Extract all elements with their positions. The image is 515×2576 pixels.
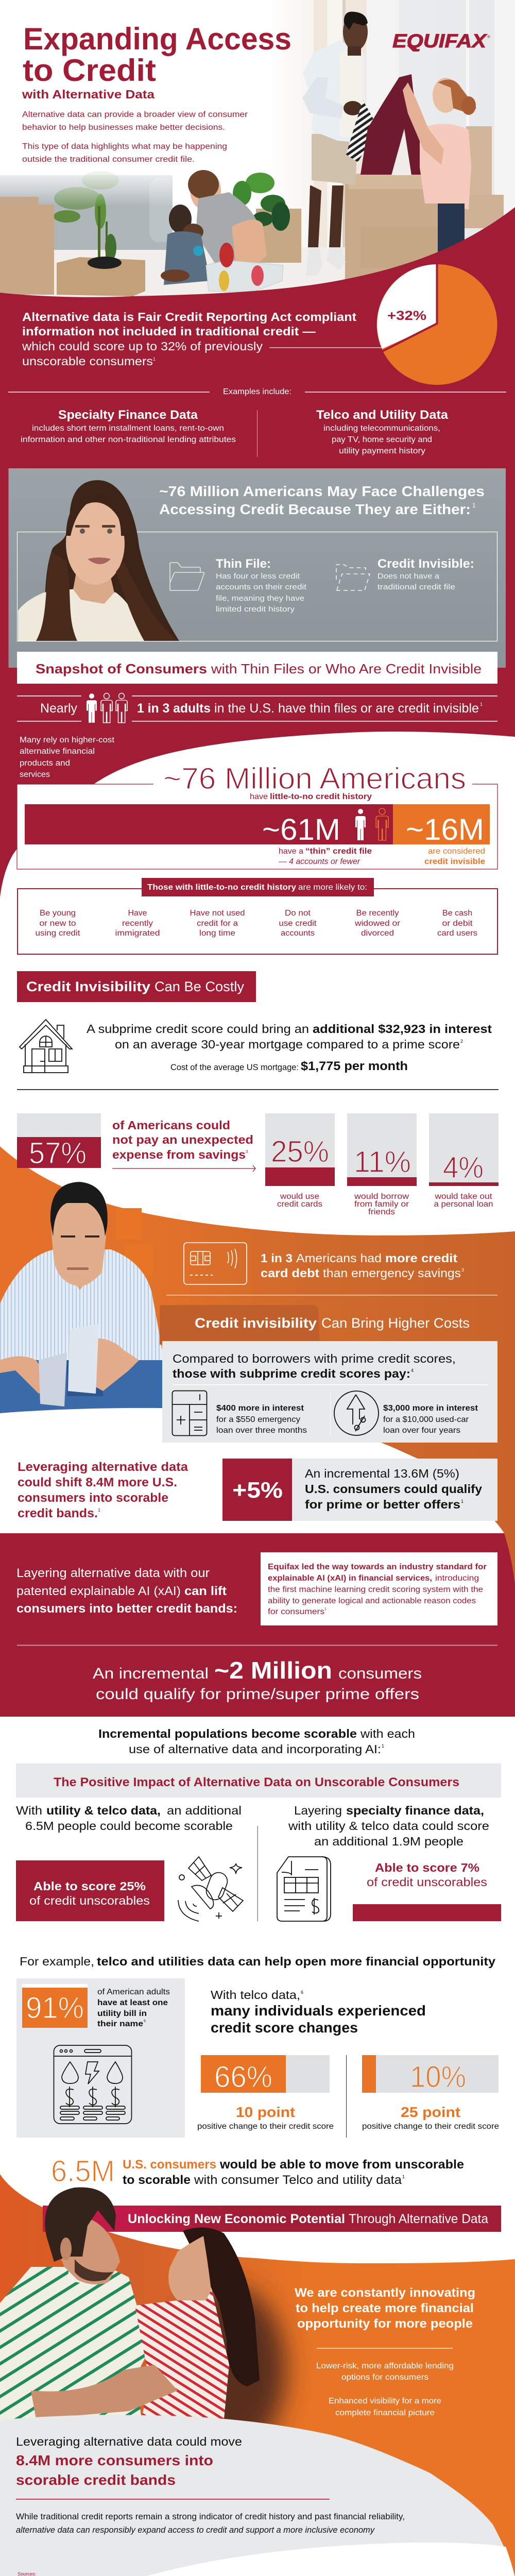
- label: Those with little-to-no credit history: [147, 883, 296, 892]
- callout: plus 5 percent: [222, 1459, 497, 1521]
- bar: 61M thin files: ~61M: [262, 813, 340, 846]
- pie chart: +32%: [377, 264, 497, 385]
- likely items: divorced: [361, 929, 394, 938]
- panel: 76 million americans breakdown: [17, 762, 497, 869]
- mortgage cost text: $1,775 per month: [301, 1059, 408, 1073]
- explainable AI callout: Equifax led the way towards an industry standard for: [268, 1563, 487, 1571]
- leveraging statement: 1: [98, 1507, 100, 1513]
- bar: 61M thin files: [25, 804, 393, 846]
- innovating statement: Enhanced visibility for a more: [329, 2397, 441, 2405]
- sub heading: have: [250, 792, 268, 801]
- thin file: file, meaning they have: [216, 594, 304, 603]
- credit card debt statement: more credit: [385, 1251, 457, 1265]
- higher-cost text: products and: [20, 759, 70, 768]
- bar: 25 percent: [265, 1113, 335, 1209]
- leveraging statement: credit bands.: [18, 1506, 98, 1520]
- caption: [97, 1988, 170, 2028]
- 6.5M statement: with consumer Telco and utility data: [194, 2173, 402, 2187]
- savings statement: 3: [246, 1149, 248, 1154]
- mortgage cost text: on an average 30-year mortgage compared to a prime score: [115, 1038, 460, 1051]
- caption invisible: are considered: [428, 847, 485, 856]
- explainable AI callout: 1: [324, 1607, 327, 1611]
- intro text: This type of data highlights what may be happening: [22, 142, 227, 151]
- examples divider: Examples include:: [223, 387, 291, 396]
- bar: 16M invisible: ~16M: [406, 813, 484, 846]
- heading: [159, 483, 485, 517]
- specialty finance data: includes short term installment loans, rent-to-own: [32, 424, 224, 433]
- likely items: card users: [437, 929, 477, 938]
- bar: 11 percent: from family or: [354, 1200, 409, 1209]
- icon: folder: [170, 563, 204, 590]
- likely items: accounts: [281, 929, 315, 938]
- telco data statement: [211, 1988, 426, 2036]
- 57 percent stat: [17, 1113, 101, 1170]
- able to score 25 box: Able to score 25%: [33, 1879, 146, 1893]
- orange lower background: [0, 2174, 515, 2576]
- photo: couple: [0, 2187, 260, 2421]
- intro text: [22, 110, 248, 164]
- caption: have at least one: [97, 1998, 168, 2007]
- explainable AI callout: explainable AI (xAI) in financial services,: [268, 1574, 432, 1583]
- layering statement: can lift: [184, 1584, 227, 1598]
- able to score 25 box: of credit unscorables: [29, 1894, 150, 1907]
- caption: their name: [97, 2020, 143, 2028]
- credit invisibility heading: Credit Invisibility: [26, 979, 150, 994]
- caption thin: — 4 accounts or fewer: [278, 857, 360, 866]
- loan text one: loan over three months: [216, 1426, 307, 1435]
- loan text two: $3,000 more in interest: [383, 1404, 478, 1413]
- telco and utility data: Telco and Utility Data: [316, 408, 449, 422]
- thin file: Thin File:: [216, 557, 271, 571]
- closing statement: 8.4M more consumers into: [16, 2452, 213, 2468]
- specialty finance text: [288, 1804, 489, 1848]
- panel: more likely to: [18, 878, 497, 954]
- specialty finance text: specialty finance data,: [346, 1804, 484, 1817]
- window glow: [116, 1208, 153, 1275]
- snapshot heading: with Thin Files or Who Are Credit Invisible: [211, 661, 482, 676]
- mortgage cost text: Cost of the average US mortgage:: [170, 1062, 299, 1072]
- leveraging statement: consumers into scorable: [18, 1491, 168, 1505]
- innovating statement: We are constantly innovating: [295, 2286, 475, 2300]
- likely items: Have: [128, 909, 147, 918]
- likely items: use credit: [279, 919, 317, 928]
- heading number: ~76 Million Americans: [163, 762, 466, 795]
- able to score 25 box: [16, 1860, 164, 1921]
- panel: subprime costs: Compared to borrowers with prime credit scores,: [173, 1352, 456, 1365]
- bar: 25 percent: 25%: [271, 1135, 329, 1168]
- stat: 10 percent: positive change to their credit score: [362, 2122, 499, 2131]
- panel: 91 percent utility bill: [16, 1978, 185, 2138]
- 1 in 3 adults statement: 1 in 3 adults: [137, 701, 211, 716]
- 6.5M statement: U.S. consumers: [123, 2158, 216, 2172]
- caption invisible: credit invisible: [424, 857, 485, 866]
- innovating statement: to help create more financial: [296, 2301, 474, 2315]
- likely items: [35, 909, 477, 938]
- alternative data statement: Alternative data is Fair Credit Reporting Act compliant: [22, 310, 356, 324]
- likely items: immigrated: [115, 929, 160, 938]
- thin file: accounts on their credit: [216, 583, 307, 591]
- heading: ~76 Million Americans May Face Challenges: [159, 483, 485, 499]
- 1 in 3 adults statement: Nearly: [40, 701, 77, 716]
- likely items: Be young: [40, 909, 76, 918]
- bar: 11 percent: [347, 1113, 417, 1216]
- for example statement: telco and utilities data can help open more financial opportunity: [97, 1955, 495, 1968]
- telco data statement: With telco data,: [211, 1988, 300, 2002]
- photo: man reading bills: [0, 1182, 162, 1414]
- telco data statement: credit score changes: [211, 2020, 358, 2036]
- 6.5M statement: would be able to move from unscorable: [219, 2158, 464, 2172]
- telco and utility data: including telecommunications,: [323, 424, 440, 433]
- caption thin: [278, 847, 372, 866]
- label: are more likely to:: [298, 883, 367, 892]
- callout: plus 5 percent: U.S. consumers could qualify: [305, 1482, 482, 1496]
- positive impact heading: The Positive Impact of Alternative Data on Unscorable Consumers: [54, 1775, 459, 1789]
- utility and telco text: [16, 1804, 242, 1833]
- loan text one: for a $550 emergency: [216, 1415, 300, 1424]
- closing statement: While traditional credit reports remain a strong indicator of credit history and past financial reliability,: [16, 2512, 405, 2521]
- leveraging statement: could shift 8.4M more U.S.: [18, 1476, 177, 1489]
- likely items: using credit: [35, 929, 80, 938]
- higher-cost text: alternative financial: [20, 747, 95, 756]
- bar: 25 percent: would use: [280, 1192, 319, 1201]
- 2 million statement: An incremental: [93, 1665, 209, 1682]
- explainable AI callout: ability to generate logical and actionable reason codes: [268, 1597, 476, 1605]
- bar: 4 percent: a personal loan: [434, 1200, 493, 1209]
- likely items: Do not: [285, 909, 311, 918]
- title: with Alternative Data: [22, 88, 154, 101]
- crimson background panel: [0, 207, 515, 907]
- icon: credit card: [184, 1243, 247, 1284]
- likely items: or new to: [39, 919, 76, 928]
- loan text one: [216, 1404, 307, 1435]
- white curved background: [7, 2543, 515, 2576]
- able to score 7 box: of credit unscorables: [367, 1875, 487, 1889]
- innovating statement: [295, 2286, 475, 2417]
- higher costs heading: Credit invisibility: [195, 1315, 317, 1331]
- innovating statement: options for consumers: [341, 2373, 428, 2382]
- stat: 10 percent: 10%: [410, 2060, 466, 2094]
- incremental populations statement: 1: [382, 1743, 384, 1749]
- 6.5M statement: [51, 2155, 464, 2188]
- utility and telco text: With: [16, 1804, 42, 1817]
- layering statement: consumers into better credit bands:: [16, 1602, 237, 1616]
- explainable AI callout: [261, 1552, 497, 1625]
- closing statement: alternative data can responsibly expand access to credit and support a more inclusive economy: [16, 2526, 375, 2535]
- for example statement: For example,: [20, 1955, 94, 1968]
- credit card debt statement: 1 in 3: [261, 1251, 293, 1265]
- savings statement: [112, 1118, 253, 1161]
- banner heading: Through Alternative Data: [349, 2212, 488, 2226]
- incremental populations statement: [98, 1727, 415, 1756]
- likely items: Be cash: [442, 909, 472, 918]
- 1 in 3 adults statement: 1: [480, 702, 483, 707]
- telco data statement: 6: [301, 1990, 303, 1995]
- panel: subprime costs: 4: [411, 1368, 414, 1373]
- icon: three people: [87, 693, 127, 723]
- likely items: Have not used: [190, 909, 245, 918]
- likely items: credit for a: [197, 919, 238, 928]
- divider: [346, 2055, 347, 2138]
- incremental populations statement: Incremental populations become scorable: [98, 1727, 357, 1740]
- icon: satellite: [178, 1857, 243, 1921]
- icon: utility bill: [54, 2045, 132, 2124]
- 6.5M statement: 6.5M: [51, 2155, 115, 2188]
- icon: document: [277, 1857, 331, 1921]
- specialty finance text: an additional 1.9M people: [314, 1835, 464, 1848]
- credit invisible: traditional credit file: [377, 583, 455, 591]
- likely items: long time: [199, 929, 235, 938]
- bar: 4 percent: 4%: [443, 1151, 484, 1184]
- telco and utility data: pay TV, home security and: [332, 435, 432, 444]
- utility and telco text: an additional: [167, 1804, 242, 1817]
- caption: of American adults: [97, 1988, 170, 1996]
- loan text two: [383, 1404, 478, 1435]
- stat: 66 percent: positive change to their credit score: [197, 2122, 334, 2131]
- explainable AI callout: introducing: [435, 1574, 479, 1583]
- Equifax logo top: ®: [487, 35, 490, 39]
- innovating statement: complete financial picture: [335, 2409, 435, 2417]
- mortgage cost text: additional $32,923 in interest: [313, 1022, 492, 1036]
- credit card debt statement: card debt: [261, 1266, 319, 1280]
- positive impact heading: [16, 1764, 501, 1798]
- caption thin: “thin” credit file: [305, 847, 372, 856]
- callout: plus 5 percent: An incremental 13.6M (5%): [305, 1467, 459, 1480]
- able to score 7 box: Able to score 7%: [375, 1861, 479, 1874]
- title: [22, 22, 291, 101]
- icon: house: [20, 1020, 72, 1073]
- divider line: [257, 410, 258, 457]
- intro text: outside the traditional consumer credit file.: [22, 155, 195, 164]
- hero photo: family moving in: [0, 0, 515, 299]
- specialty finance data: Specialty Finance Data: [58, 408, 198, 422]
- credit card debt statement: Americans had: [296, 1251, 382, 1265]
- intro text: behavior to help businesses make better decisions.: [22, 123, 225, 132]
- alternative data statement: 1: [153, 357, 156, 362]
- stat: 66 percent: 66%: [214, 2060, 272, 2094]
- bar: 11 percent: 11%: [354, 1145, 411, 1179]
- explainable AI callout: for consumers: [268, 1607, 324, 1616]
- banner heading: [43, 2206, 501, 2232]
- credit invisibility heading: Can Be Costly: [154, 979, 244, 994]
- layering statement: patented explainable AI (xAI): [16, 1584, 181, 1598]
- bar: 16M invisible: [393, 804, 490, 846]
- specialty finance data: [21, 408, 236, 444]
- caption thin: have a: [279, 847, 303, 856]
- credit invisible: Does not have a: [377, 572, 440, 581]
- stat: 66 percent: 10 point: [236, 2104, 295, 2120]
- icon: rate up arrow: [334, 1391, 379, 1435]
- icon: dashed folder: [336, 565, 370, 590]
- snapshot heading: Snapshot of Consumers: [36, 661, 207, 676]
- utility and telco text: 6.5M people could become scorable: [25, 1819, 233, 1833]
- label: [142, 878, 374, 896]
- stat: 10 percent: [362, 2055, 499, 2131]
- specialty finance data: information and other non-traditional lending attributes: [21, 435, 236, 444]
- bar: 4 percent: [429, 1113, 499, 1209]
- credit card debt statement: 3: [461, 1267, 464, 1273]
- caption: 5: [144, 2020, 146, 2023]
- panel: 91 percent utility bill: 91%: [26, 1991, 84, 2025]
- callout: plus 5 percent: for prime or better offers: [305, 1498, 460, 1511]
- banner heading: Unlocking New Economic Potential: [128, 2212, 345, 2226]
- 2 million statement: could qualify for prime/super prime offers: [96, 1686, 419, 1703]
- innovating statement: Lower-risk, more affordable lending: [316, 2362, 454, 2370]
- white curved background: [0, 1408, 504, 1546]
- higher-cost text: [20, 736, 115, 779]
- sub heading: little-to-no credit history: [270, 792, 372, 801]
- savings statement: of Americans could: [112, 1118, 230, 1132]
- title: to Credit: [23, 53, 156, 88]
- dark glow behind couple: [167, 2285, 286, 2455]
- bar: 4 percent: would take out: [434, 1192, 492, 1201]
- specialty finance text: Layering: [294, 1804, 342, 1817]
- portrait: woman: [18, 480, 179, 641]
- caption invisible: [424, 847, 485, 866]
- loan text two: for a $10,000 used-car: [383, 1415, 469, 1424]
- bar: 25 percent: credit cards: [277, 1200, 322, 1209]
- alternative data statement: unscorable consumers: [22, 354, 153, 368]
- higher-cost text: services: [20, 770, 50, 779]
- layering statement: Layering alternative data with our: [16, 1566, 210, 1580]
- Equifax logo top: EQUIFAX: [392, 30, 488, 52]
- layering statement: [16, 1566, 237, 1616]
- grey curved background: [0, 2415, 515, 2576]
- thin file: Has four or less credit: [216, 572, 300, 581]
- caption: utility bill in: [97, 2009, 147, 2018]
- alternative data statement: [22, 310, 382, 368]
- able to score 7 box: [353, 1861, 501, 1921]
- mortgage cost text: [87, 1022, 492, 1073]
- bar: 11 percent: friends: [368, 1208, 395, 1216]
- credit invisible: [377, 557, 474, 591]
- 57 percent stat: 57%: [29, 1137, 87, 1170]
- incremental populations statement: use of alternative data and incorporating AI:: [129, 1742, 381, 1756]
- higher costs heading: [160, 1305, 470, 1345]
- credit invisible: Credit Invisible:: [377, 557, 474, 571]
- higher costs heading: Can Bring Higher Costs: [321, 1315, 470, 1331]
- icon: calculator: [172, 1391, 207, 1435]
- closing statement: [16, 2435, 405, 2535]
- telco and utility data: [316, 408, 449, 455]
- snapshot heading: [17, 652, 497, 684]
- panel: 76 million challenges: [8, 468, 506, 668]
- likely items: recently: [122, 919, 153, 928]
- alternative data statement: which could score up to 32% of previously: [22, 340, 263, 353]
- telco and utility data: utility payment history: [339, 447, 425, 455]
- leveraging statement: Leveraging alternative data: [18, 1460, 188, 1474]
- credit card debt statement: [261, 1251, 464, 1280]
- callout: plus 5 percent: 1: [461, 1499, 464, 1504]
- heading: Accessing Credit Because They are Either:: [159, 501, 471, 517]
- callout: plus 5 percent: +5%: [232, 1478, 283, 1503]
- telco data statement: many individuals experienced: [211, 2003, 426, 2019]
- specialty finance text: with utility & telco data could score: [288, 1819, 489, 1833]
- likely items: Be recently: [356, 909, 399, 918]
- stat: 66 percent: [197, 2055, 334, 2131]
- panel: subprime costs: those with subprime credit scores pay:: [173, 1367, 410, 1380]
- divider: [17, 1645, 497, 1646]
- loan text one: $400 more in interest: [216, 1404, 304, 1413]
- stat: 10 percent: 25 point: [401, 2104, 460, 2120]
- 2 million statement: [93, 1657, 422, 1703]
- thin file: limited credit history: [216, 605, 295, 614]
- divider: [17, 1089, 499, 1090]
- title: Expanding Access: [23, 22, 291, 56]
- innovating statement: opportunity for more people: [297, 2317, 473, 2331]
- savings statement: expense from savings: [112, 1148, 246, 1161]
- closing statement: Leveraging alternative data could move: [16, 2435, 242, 2448]
- 1 in 3 adults statement: in the U.S. have thin files or are credit invisible: [214, 701, 479, 716]
- pie chart: +32%: +32%: [387, 309, 426, 323]
- higher-cost text: Many rely on higher-cost: [20, 736, 115, 744]
- heading: 1: [472, 502, 476, 509]
- alternative data statement: information not included in traditional credit —: [22, 325, 316, 338]
- bar: 11 percent: would borrow: [354, 1192, 409, 1201]
- 6.5M statement: 1: [402, 2174, 405, 2179]
- credit card debt statement: than emergency savings: [323, 1266, 461, 1280]
- crimson band: [0, 1533, 515, 1717]
- mortgage cost text: 2: [460, 1039, 463, 1044]
- closing statement: scorable credit bands: [16, 2472, 176, 2488]
- likely items: or debit: [442, 919, 473, 928]
- credit invisibility heading: [17, 971, 256, 1002]
- likely items: widowed or: [354, 919, 400, 928]
- incremental populations statement: with each: [360, 1727, 415, 1740]
- savings statement: not pay an unexpected: [112, 1133, 253, 1146]
- utility and telco text: utility & telco data,: [46, 1804, 161, 1817]
- leveraging statement: [18, 1460, 188, 1520]
- 6.5M statement: to scorable: [123, 2173, 191, 2187]
- intro text: Alternative data can provide a broader view of consumer: [22, 110, 248, 119]
- loan text two: loan over four years: [383, 1426, 460, 1435]
- explainable AI callout: the first machine learning credit scoring system with the: [268, 1585, 483, 1594]
- 2 million statement: ~2 Million: [214, 1657, 332, 1684]
- thin file: [216, 557, 307, 614]
- 1 in 3 adults statement: [17, 693, 497, 723]
- panel: subprime costs: [162, 1341, 497, 1443]
- orange curved background: [0, 1146, 515, 1597]
- arrow: [112, 1165, 255, 1172]
- curved white background: [0, 732, 515, 909]
- 2 million statement: consumers: [338, 1665, 422, 1682]
- mortgage cost text: A subprime credit score could bring an: [87, 1022, 309, 1036]
